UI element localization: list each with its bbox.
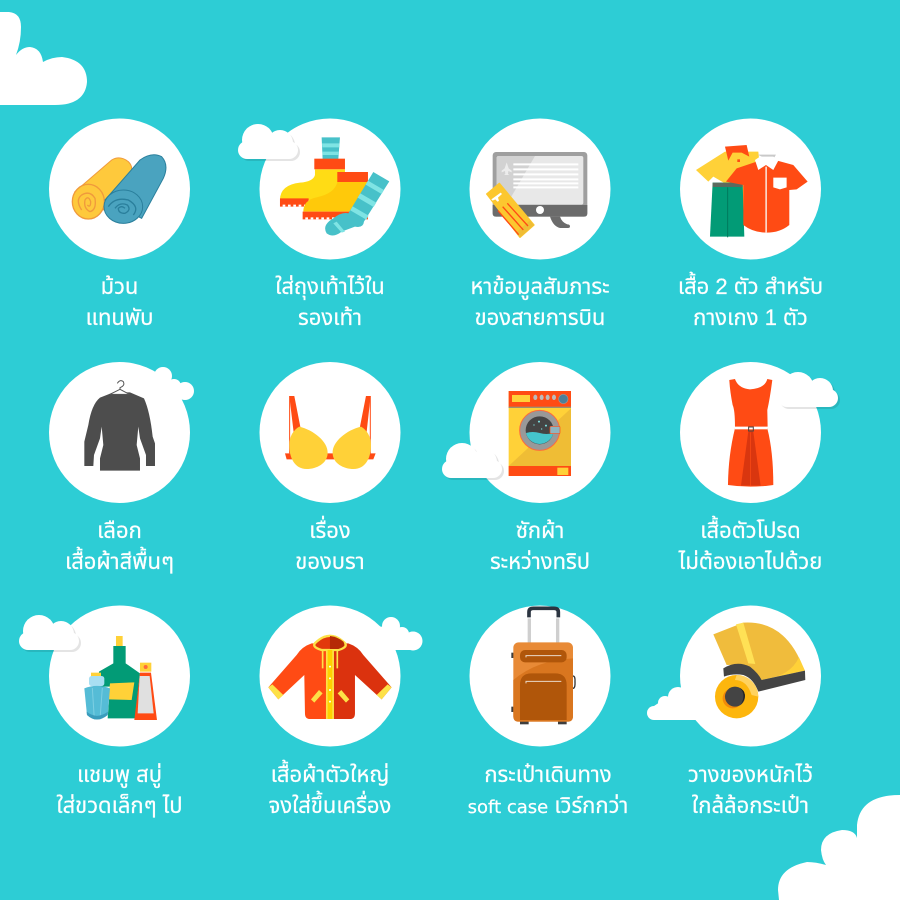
item: socks in shoes: รองเท้า — [298, 305, 362, 330]
icon: suitcase wheel — [713, 623, 805, 718]
icon: suitcase — [511, 608, 575, 724]
item: towel rolls: แทนพับ — [86, 305, 153, 330]
item: heavy items near wheels — [647, 606, 821, 818]
cloud — [240, 126, 300, 161]
circle — [680, 118, 821, 260]
item: favorite shirt: ไม่ต้องเอาไปด้วย — [678, 549, 822, 574]
item: soft case suitcase: soft case เวิร์กกว่า — [468, 793, 628, 818]
circle — [680, 606, 821, 746]
circle — [680, 362, 821, 503]
item: two shirts one trousers — [678, 118, 823, 330]
cloud — [370, 617, 422, 650]
circle — [470, 118, 610, 260]
label: หาข้อมูลสัมภาระ — [470, 274, 610, 300]
cloud: bottom right corner — [778, 795, 900, 900]
item: big clothes: จงใส่ขึ้นเครื่อง — [269, 790, 391, 818]
label: กระเป๋าเดินทาง — [484, 762, 612, 787]
item: two shirts one trousers: กางเกง 1 ตัว — [693, 305, 808, 330]
icon: boots and sock — [280, 137, 389, 235]
cloud — [21, 617, 81, 652]
icon: washing machine — [509, 391, 571, 476]
label: เลือก — [97, 518, 142, 543]
circle — [260, 362, 400, 503]
cloud — [19, 615, 79, 650]
label: ม้วน — [101, 274, 138, 299]
icon: bra — [285, 396, 376, 469]
circle — [260, 118, 400, 260]
cloud: top left corner — [0, 12, 87, 105]
cloud — [647, 687, 710, 720]
label: เสื้อตัวโปรด — [700, 515, 801, 543]
circle — [49, 362, 190, 503]
circle — [470, 606, 610, 746]
item: small bottles: ใส่ขวดเล็กๆ ไป — [56, 793, 183, 818]
label: เรื่อง — [309, 515, 351, 543]
cloud — [778, 372, 838, 407]
item: bra: ของบรา — [295, 549, 365, 574]
cloud — [780, 374, 840, 409]
item: bra — [260, 362, 400, 574]
item: soft case suitcase — [468, 606, 628, 818]
circle — [260, 606, 400, 746]
cloud — [442, 443, 502, 478]
icon: monitor and ticket — [487, 152, 587, 237]
item: baggage allowance: ของสายการบิน — [475, 305, 605, 330]
icon: shirts and trousers — [696, 145, 808, 237]
label: วางของหนักไว้ — [688, 762, 813, 787]
label: ใส่ถุงเท้าไว้ใน — [275, 274, 385, 300]
item: laundry — [442, 362, 610, 574]
item: laundry: ระหว่างทริป — [490, 549, 590, 574]
item: favorite shirt — [678, 362, 840, 574]
item: big clothes — [260, 606, 422, 818]
circle — [49, 118, 190, 260]
icon: bottles — [84, 636, 157, 720]
item: baggage allowance — [470, 118, 610, 330]
item: towel rolls — [49, 118, 190, 330]
cloud — [150, 367, 194, 400]
icon: dark long sleeve shirt on hanger — [84, 381, 155, 471]
circle — [49, 606, 190, 746]
icon: red dress — [728, 379, 773, 487]
cloud — [444, 445, 504, 480]
label: เสื้อ 2 ตัว สำหรับ — [678, 271, 823, 299]
label: แชมพู สบู่ — [77, 762, 162, 788]
label: เสื้อผ้าตัวใหญ่ — [271, 759, 389, 787]
icon: hooded jacket — [268, 636, 392, 719]
circle — [470, 362, 610, 503]
item: plain colored clothes — [49, 362, 194, 574]
label: ซักผ้า — [516, 518, 564, 543]
item: plain colored clothes: เสื้อผ้าสีพื้นๆ — [65, 546, 174, 574]
item: heavy items near wheels: ใกล้ล้อกระเป๋า — [692, 793, 809, 818]
item: small bottles — [19, 606, 190, 818]
item: socks in shoes — [238, 118, 400, 330]
icon: rolled towels — [72, 155, 166, 223]
cloud — [238, 124, 298, 159]
